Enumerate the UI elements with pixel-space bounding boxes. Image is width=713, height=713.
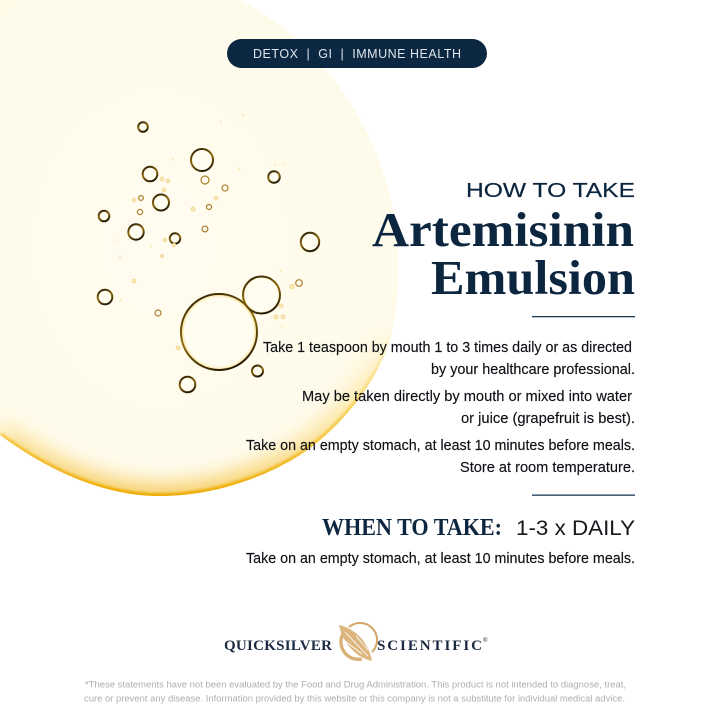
heading: HOW TO TAKE [466,180,635,202]
disclaimer [84,680,626,704]
heading: Emulsion [431,250,635,305]
bubble ring set [98,122,319,392]
category pill: DETOX | GI | IMMUNE HEALTH [253,47,461,61]
logo: SCIENTIFIC [377,638,482,654]
directions text: Take 1 teaspoon by mouth 1 to 3 times daily or as directed [263,339,632,356]
large bubble [181,294,257,370]
when to take: Take on an empty stomach, at least 10 minutes before meals. [246,550,635,567]
directions text: by your healthcare professional. [431,361,635,378]
air bubbles cluster [98,114,319,392]
logo [224,623,488,661]
medium bubble [243,276,280,314]
directions text: or juice (grapefruit is best). [461,410,635,427]
small bubbles [137,176,302,316]
logo: ® [483,637,488,644]
oil droplet background [0,0,398,496]
disclaimer: *These statements have not been evaluated by the Food and Drug Administration. This product is not intended to diagnose, treat, [85,680,626,690]
category pill [227,39,487,68]
when to take [246,514,635,567]
disclaimer: cure or prevent any disease. Information provided by this website or this company is not a substitute for individual medical advice. [84,694,625,704]
directions text [246,339,635,476]
heading: Artemisinin [372,202,634,257]
directions text: Store at room temperature. [460,459,635,476]
icon: gold wing circle [339,623,377,661]
heading [372,180,635,305]
directions text: May be taken directly by mouth or mixed into water [302,388,632,405]
directions text: Take on an empty stomach, at least 10 minutes before meals. [246,437,635,454]
tiny droplets [116,114,294,350]
when to take: WHEN TO TAKE: [322,514,502,541]
when to take: 1-3 x DAILY [516,517,635,540]
logo: QUICKSILVER [224,638,332,654]
